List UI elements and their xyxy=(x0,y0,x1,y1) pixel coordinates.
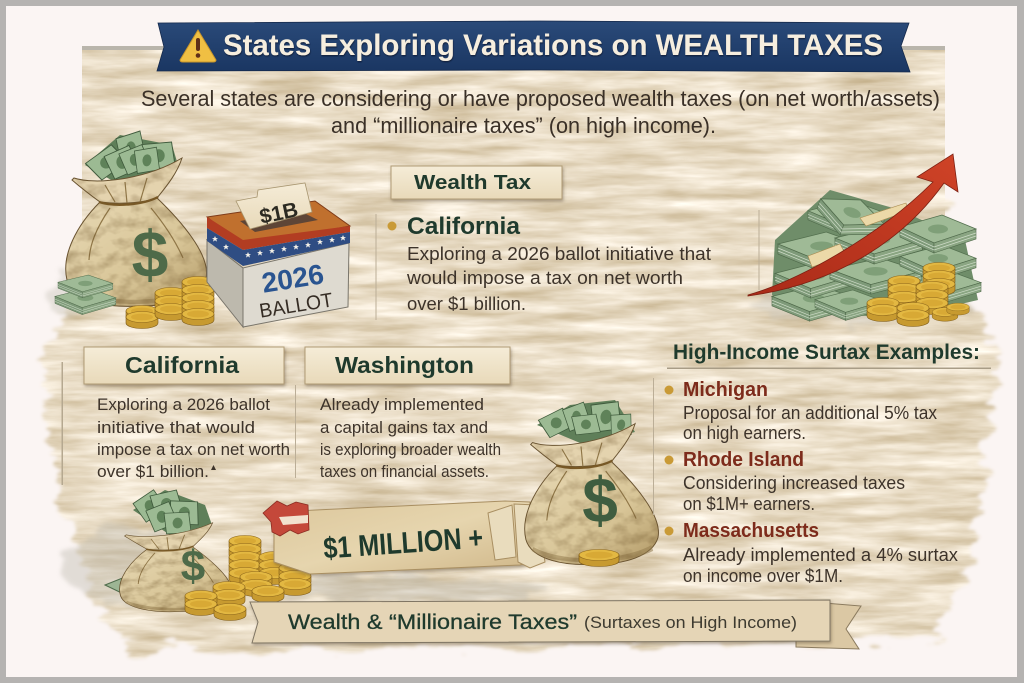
massachusetts: on income over $1M. xyxy=(683,566,843,586)
cash in bag xyxy=(83,131,179,185)
coin xyxy=(579,550,619,566)
michigan: Michigan xyxy=(683,379,768,401)
bottom ribbon xyxy=(250,600,861,649)
label: wealth tax xyxy=(391,166,562,199)
dollar sign: $ xyxy=(181,542,205,591)
panel: high-income surtax examples xyxy=(653,341,991,586)
loose banknote xyxy=(105,575,185,609)
box body xyxy=(207,240,349,327)
washington text: a capital gains tax and xyxy=(320,418,488,437)
coins xyxy=(185,536,311,620)
sack xyxy=(66,158,207,306)
massachusetts xyxy=(664,520,958,586)
label: wealth tax: Wealth Tax xyxy=(414,172,531,194)
ballot year: 2026 xyxy=(260,258,326,299)
slot xyxy=(240,211,318,232)
california text: initiative that would xyxy=(97,418,255,437)
scroll roll xyxy=(488,504,545,568)
washington text: is exploring broader wealth xyxy=(320,440,501,459)
cash band xyxy=(808,203,908,267)
surtax heading: High-Income Surtax Examples: xyxy=(673,341,980,364)
washington label: Washington xyxy=(335,352,474,378)
california description: over $1 billion. xyxy=(407,294,526,314)
california heading: California xyxy=(407,213,521,240)
panel: washington xyxy=(295,347,510,481)
michigan: Proposal for an additional 5% tax xyxy=(683,403,937,423)
california text xyxy=(97,395,290,481)
bullet xyxy=(388,222,396,230)
lid xyxy=(207,201,350,246)
cash stack base xyxy=(772,190,978,318)
arrow xyxy=(748,154,958,296)
washington label xyxy=(305,347,510,384)
illustration: cash stacks with rising arrow xyxy=(748,154,981,326)
california label: California xyxy=(125,352,239,378)
ballot slip: $1B xyxy=(258,198,300,229)
california text: over $1 billion. xyxy=(97,462,209,481)
dollar sign: $ xyxy=(132,217,168,291)
california text: impose a tax on net worth xyxy=(97,440,290,459)
coins xyxy=(867,262,969,326)
red ribbon seal xyxy=(263,501,309,536)
grey shadow washes xyxy=(45,273,970,603)
california description xyxy=(406,244,711,314)
rhode island: on $1M+ earners. xyxy=(683,494,815,514)
intro text: Several states are considering or have proposed wealth taxes (on net worth/assets) xyxy=(141,86,940,111)
illustration: ballot box xyxy=(207,183,350,327)
cash in bag xyxy=(537,398,635,445)
illustration: money bag and coins xyxy=(55,131,214,328)
massachusetts: Already implemented a 4% surtax xyxy=(683,545,958,565)
rhode island xyxy=(664,449,905,514)
cash stacks xyxy=(772,187,981,321)
ribbon subtitle: (Surtaxes on High Income) xyxy=(584,613,797,632)
california description: would impose a tax on net worth xyxy=(406,268,683,288)
washington text xyxy=(320,395,501,481)
rhode island: Considering increased taxes xyxy=(683,473,905,493)
icon: warning triangle xyxy=(180,30,216,62)
scroll text: $1 MILLION + xyxy=(322,521,484,566)
sack xyxy=(525,424,658,565)
illustration: right money bag xyxy=(525,398,658,566)
washington text: Already implemented xyxy=(320,395,484,414)
intro text: and “millionaire taxes” (on high income). xyxy=(331,113,716,138)
dollar sign: $ xyxy=(582,464,618,536)
ballot slip xyxy=(236,183,312,229)
title: States Exploring Variations on WEALTH TAXES xyxy=(223,29,883,62)
panel: california xyxy=(62,347,290,485)
illustration: $1 million scroll xyxy=(263,501,545,574)
rhode island: Rhode Island xyxy=(683,449,804,471)
massachusetts: Massachusetts xyxy=(683,520,819,542)
panel: wealth tax xyxy=(376,166,711,320)
ribbon title: Wealth & “Millionaire Taxes” xyxy=(288,611,577,634)
illustration: lower-left money bag and coins xyxy=(105,488,311,620)
star band xyxy=(207,228,350,266)
washington text: taxes on financial assets. xyxy=(320,462,489,481)
michigan xyxy=(664,379,937,443)
michigan: on high earners. xyxy=(683,423,806,443)
coins xyxy=(126,276,214,328)
ballot label: BALLOT xyxy=(258,289,334,323)
california text: Exploring a 2026 ballot xyxy=(97,395,270,414)
sack xyxy=(120,523,232,612)
california description: Exploring a 2026 ballot initiative that xyxy=(407,244,711,264)
title banner xyxy=(157,21,910,72)
cash in bag xyxy=(131,488,212,538)
cash pile xyxy=(55,275,116,315)
intro text xyxy=(141,86,940,138)
california label xyxy=(84,347,284,384)
